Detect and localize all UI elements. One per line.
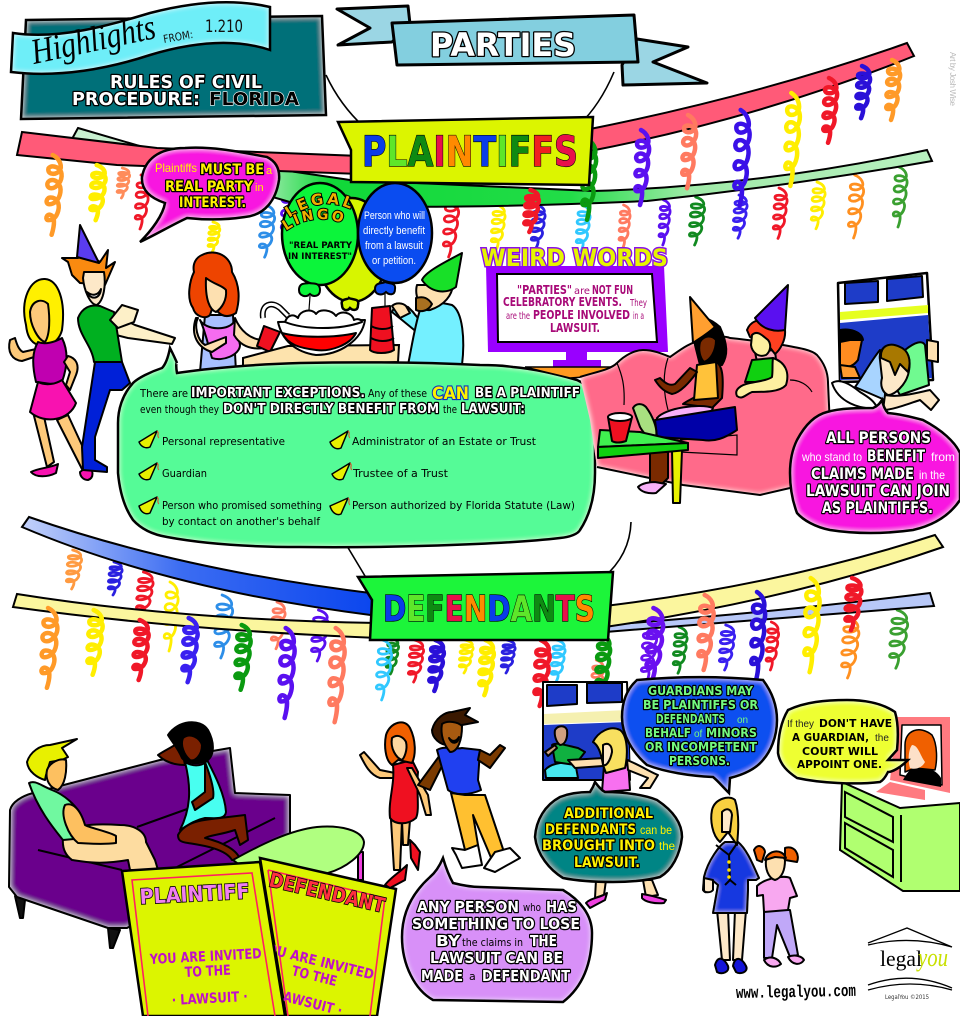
big green exceptions bubble: LAWSUIT: <box>461 402 525 417</box>
callout: any person <box>402 858 592 1002</box>
streamers: thin lower section coils behind ribbons <box>66 550 908 702</box>
ribbon: highlights from 1.210: 1.210 <box>205 17 243 37</box>
figure: man in party hat pointing <box>62 225 175 472</box>
weird words panel: are <box>574 286 590 297</box>
invitation: defendant: TO THE <box>290 963 339 990</box>
figure: blonde woman in pink <box>9 279 92 480</box>
figure: woman in pink behind teal bubble <box>568 728 666 908</box>
callout: any person: the claims in <box>462 936 523 949</box>
callout: guardians may be: on <box>737 715 748 726</box>
weird words panel: PEOPLE INVOLVED <box>533 308 630 322</box>
callout: additional defendants: DEFENDANTS <box>545 822 636 838</box>
callout: any person: SOMETHING TO LOSE <box>412 915 580 933</box>
callout: additional defendants: ADDITIONAL <box>564 806 653 822</box>
callout: any person: BY <box>436 932 461 950</box>
weird words panel: LAWSUIT. <box>550 321 600 335</box>
balloon: yellow <box>316 198 388 310</box>
balloon: legal lingo green: LEGAL <box>283 192 352 218</box>
callout: guardians may be: GUARDIANS MAY <box>648 683 754 698</box>
figure: redhead woman with cup <box>189 252 280 372</box>
legalyou logo <box>868 928 952 1001</box>
header banner: highlights: RULES OF CIVIL <box>110 72 262 93</box>
list: who can be a plaintiff: Administrator of an Estate or Trust <box>352 435 537 448</box>
green table with cup <box>598 413 688 503</box>
punch bowl with ladle <box>263 304 365 355</box>
ribbon: highlights from 1.210 <box>11 2 270 74</box>
callout: guardians may be: DEFENDANTS <box>656 711 725 726</box>
big green exceptions bubble: IMPORTANT EXCEPTIONS. <box>191 386 365 401</box>
streamers: thin upper section coils behind ribbons <box>117 167 907 257</box>
ribbon: blue lower left <box>22 517 378 616</box>
ribbon: highlights from 1.210: Highlights <box>27 7 159 72</box>
callout: guardians may be: BEHALF <box>645 725 691 740</box>
big green exceptions bubble: Any of these <box>368 387 427 400</box>
invitation: plaintiff: · LAWSUIT · <box>171 989 248 1009</box>
weird words panel: NOT FUN <box>592 283 633 297</box>
callout: all persons: from <box>931 450 955 464</box>
callout: court will appoint: A GUARDIAN, <box>792 731 869 744</box>
hanging strings <box>326 72 631 581</box>
callout: guardians may be: PERSONS. <box>669 753 730 768</box>
balloon: legal lingo green <box>280 182 358 310</box>
banner: defendants <box>358 572 613 640</box>
weird words panel: are the <box>506 311 530 322</box>
callout: all persons: AS PLAINTIFFS. <box>822 498 933 517</box>
big green exceptions bubble: CAN <box>432 384 469 404</box>
weird words panel: in a <box>633 311 644 322</box>
callout: real party in interest: Plaintiffs <box>155 161 197 175</box>
ribbon: yellow lower left <box>13 594 378 638</box>
callout: guardians may be: MINORS <box>706 725 757 740</box>
callout: any person: a <box>469 970 476 983</box>
credit: art by Josh Wise: Art by Josh Wise <box>948 52 957 107</box>
list: who can be a plaintiff: Person who promised something <box>162 499 322 512</box>
ribbon: blue lower right <box>605 593 934 632</box>
ribbon: pink upper left <box>17 132 360 174</box>
list: who can be a plaintiff: by contact on another's behalf <box>162 515 321 528</box>
callout: any person: who <box>523 901 541 914</box>
legalyou logo: legal <box>880 946 922 971</box>
callout: any person: THE <box>530 932 557 950</box>
big green exceptions bubble: even though they <box>140 403 219 416</box>
callout: any person: ANY PERSON <box>417 898 519 916</box>
balloon: legal lingo green: "REAL PARTY <box>289 241 352 251</box>
invitation: plaintiff: PLAINTIFF <box>139 879 250 909</box>
figure: woman on sofa with orange hat <box>633 297 737 493</box>
balloon: definition blue: from a lawsuit <box>365 240 423 252</box>
callout: real party in interest: a <box>266 165 273 177</box>
figure: little girl <box>754 846 804 967</box>
callout: any person: LAWSUIT CAN BE <box>430 949 563 967</box>
banner: parties: PARTIES <box>430 26 576 64</box>
balloon: definition blue: directly benefit <box>363 225 425 237</box>
weird words panel: CELEBRATORY EVENTS. <box>503 295 622 309</box>
callout: real party in interest: INTEREST. <box>179 195 246 211</box>
figure: dancing man in blue <box>418 708 520 872</box>
callout: court will appoint <box>778 700 908 783</box>
callout: all persons <box>790 400 960 533</box>
list: who can be a plaintiff: Trustee of a Trust <box>352 467 449 480</box>
callout: court will appoint: the <box>875 733 889 744</box>
green desk <box>840 782 960 891</box>
balloon: legal lingo green: IN INTEREST" <box>288 252 352 262</box>
callout: any person: HAS <box>546 898 577 916</box>
callout: court will appoint: If they <box>787 719 814 730</box>
callout: guardians may be: BE PLAINTIFFS OR <box>643 697 758 712</box>
callout: guardians may be <box>622 677 777 793</box>
pink sofa <box>580 337 830 495</box>
figure: man in green hat with beard <box>392 253 463 365</box>
callout: guardians may be: of <box>694 729 703 740</box>
figure: blond man on sofa <box>27 739 158 870</box>
weird words panel: WEIRD WORDS <box>481 244 668 272</box>
ribbon: green upper <box>72 128 932 207</box>
callout: all persons: who stand to <box>801 450 862 464</box>
callout: all persons: ALL PERSONS <box>826 428 931 447</box>
weird words panel <box>481 244 668 367</box>
invitation: plaintiff <box>122 862 285 1016</box>
ribbon: yellow lower right <box>605 535 943 627</box>
callout: all persons: CLAIMS MADE <box>811 464 914 483</box>
callout: real party in interest: MUST BE <box>200 162 264 178</box>
invitation: plaintiff: TO THE <box>184 963 231 981</box>
legalyou logo: you <box>916 943 948 972</box>
big green exceptions bubble: BE A PLAINTIFF <box>475 386 580 401</box>
invitation: defendant: YOU ARE INVITED <box>256 939 375 983</box>
invitation: plaintiff: YOU ARE INVITED <box>149 946 262 968</box>
balloon: definition blue <box>358 183 432 306</box>
banner: plaintiffs: PLAINTIFFS <box>362 127 578 176</box>
callout: guardians may be: OR INCOMPETENT <box>645 739 757 754</box>
list: who can be a plaintiff: Person authorized by Florida Statute (Law) <box>352 499 575 512</box>
big green exceptions bubble: DON'T DIRECTLY BENEFIT FROM <box>223 402 439 417</box>
callout: additional defendants: LAWSUIT. <box>574 855 640 871</box>
header banner: highlights: FLORIDA <box>209 89 299 110</box>
streamers: thick lower section coils <box>41 578 861 722</box>
callout: any person: DEFENDANT <box>482 967 571 985</box>
header banner: highlights: PROCEDURE: <box>72 89 200 110</box>
banner: defendants: DEFENDANTS <box>383 589 595 630</box>
weird words panel: They <box>629 298 647 309</box>
figure: guardian woman <box>703 798 759 973</box>
callout: additional defendants: BROUGHT INTO <box>542 838 655 854</box>
big green exceptions bubble: There are <box>139 387 188 400</box>
callout: real party in interest: in <box>255 182 264 194</box>
punch table <box>243 345 399 368</box>
callout: real party in interest: REAL PARTY <box>165 179 254 195</box>
icons: party hat bullets <box>139 431 352 515</box>
header banner: highlights <box>11 2 326 119</box>
legalyou logo: LegalYou ©2015 <box>885 994 929 1001</box>
callout: court will appoint: APPOINT ONE. <box>797 758 882 771</box>
weird words panel: "PARTIES" <box>517 283 572 297</box>
streamers: thick upper section coils <box>46 60 900 235</box>
callout: real party in interest <box>140 148 279 242</box>
ribbon: pink upper right <box>590 43 914 151</box>
balloon: legal lingo green: LINGO <box>280 208 344 232</box>
callout: court will appoint: COURT WILL <box>802 745 878 758</box>
big green exceptions bubble <box>118 348 595 547</box>
callout: additional defendants <box>535 782 682 882</box>
callout: any person: MADE <box>421 967 463 985</box>
window with people climbing out <box>832 273 939 410</box>
ribbon: highlights from 1.210: FROM: <box>162 28 194 46</box>
big green exceptions bubble: the <box>443 403 457 416</box>
balloon: definition blue: Person who will <box>364 210 425 222</box>
invitation: defendant <box>256 858 396 1016</box>
judge on monitor <box>876 717 950 800</box>
callout: court will appoint: DON'T HAVE <box>819 717 892 730</box>
invitation: defendant: DEFENDANT <box>267 867 388 917</box>
shelf under screen <box>525 367 620 378</box>
banner: plaintiffs <box>338 117 593 185</box>
banner: parties <box>337 6 707 85</box>
list: who can be a plaintiff <box>162 435 575 528</box>
list: who can be a plaintiff: Personal representative <box>162 435 285 448</box>
callout: all persons: in the <box>919 468 945 482</box>
callout: additional defendants: the <box>659 839 675 853</box>
purple sofa <box>9 748 290 948</box>
callout: additional defendants: can be <box>640 823 672 837</box>
website url: www.legalyou.com <box>736 983 856 1004</box>
window: guardian scene <box>543 682 630 780</box>
figure: dancing woman in red <box>360 722 431 888</box>
balloon: definition blue: or petition. <box>372 255 416 267</box>
red cup stack <box>370 306 394 353</box>
list: who can be a plaintiff: Guardian <box>162 467 207 480</box>
figure: woman in cyan on sofa <box>158 722 248 860</box>
green coffee table <box>233 827 364 880</box>
callout: all persons: BENEFIT <box>867 446 925 465</box>
figure: man on sofa with purple hat <box>736 285 788 397</box>
